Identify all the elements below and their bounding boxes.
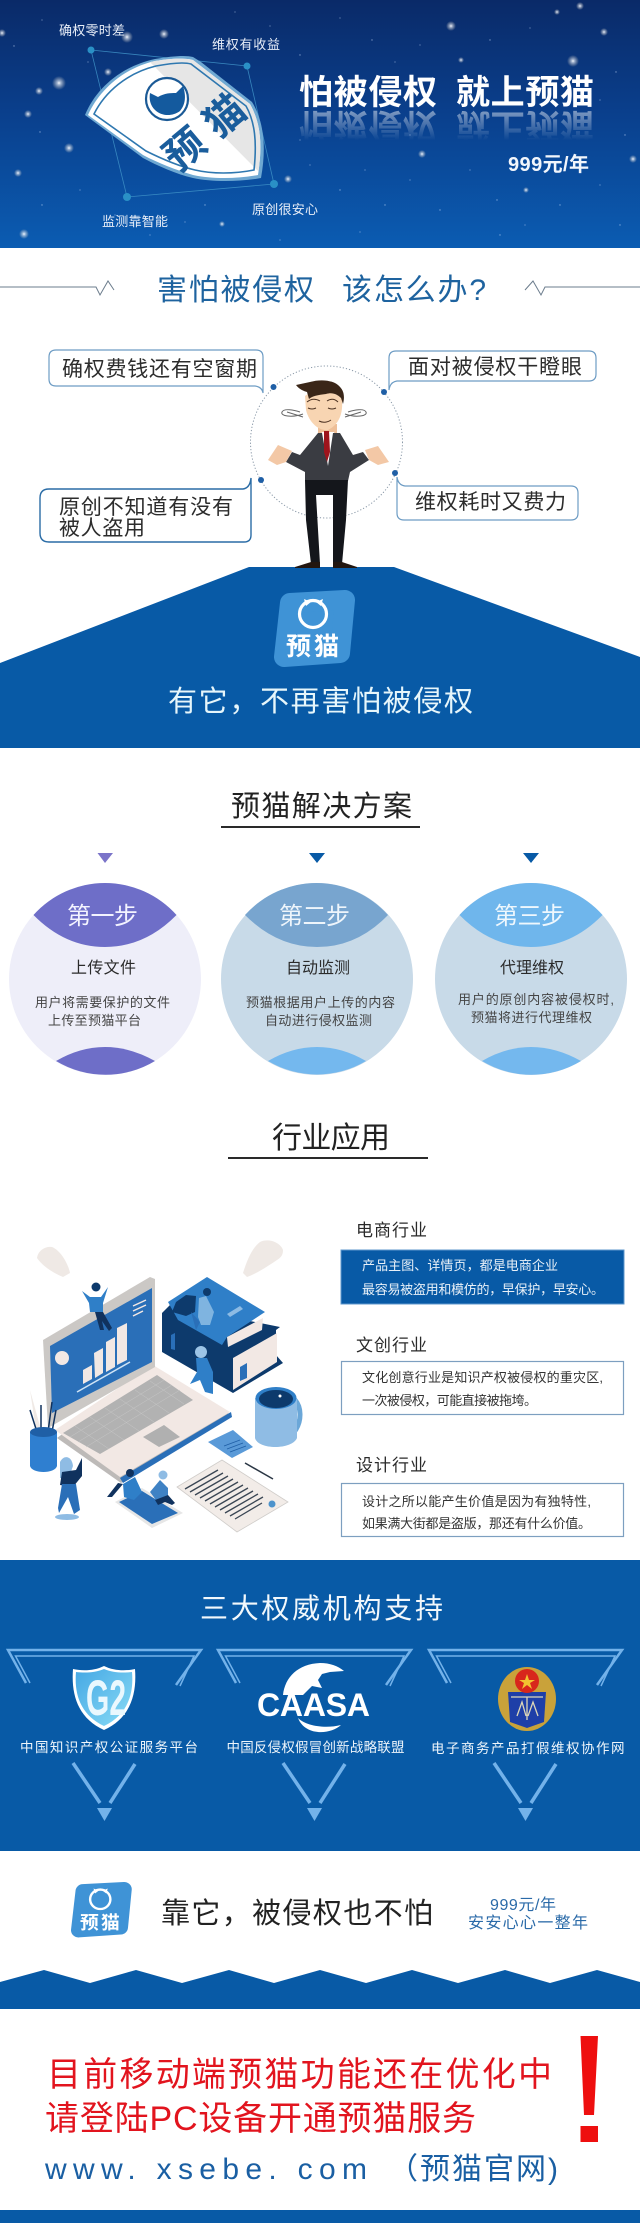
- heading: industry: 行业应用: [272, 1122, 390, 1155]
- panel: step one: 上传至预猫平台: [48, 1013, 141, 1028]
- platform trapezoid: [0, 567, 640, 748]
- price note: [468, 1896, 588, 1932]
- slogan: not afraid: 靠它，被侵权也不怕: [161, 1897, 433, 1930]
- price note: 安安心心一整年: [468, 1914, 588, 1932]
- icon: yumao shield logo: [85, 55, 270, 181]
- panel: design: 设计之所以能产生价值是因为有独特性,: [362, 1494, 591, 1509]
- panel: authorities: [0, 1560, 640, 1851]
- panel: step one: 上传文件: [71, 959, 136, 977]
- heading: what to do: 该怎么办?: [342, 274, 486, 307]
- speech bubble: 干瞪眼: [389, 351, 596, 390]
- panel: culture: 文化创意行业是知识产权被侵权的重灾区,: [362, 1370, 603, 1385]
- website line: [44, 2153, 558, 2186]
- laptop screen: [43, 1277, 155, 1428]
- dark book: [162, 1305, 283, 1393]
- woman walking: [190, 1346, 213, 1394]
- speech bubble: 盗用: [40, 478, 251, 542]
- speech bubble: 干瞪眼: 面对被侵权干瞪眼: [408, 356, 582, 379]
- icon: CAASA logo: [257, 1663, 370, 1732]
- panel: step three: [435, 883, 627, 1075]
- panel: step three: 第三步: [494, 903, 565, 930]
- woman with raised arm: [55, 1457, 82, 1520]
- icon: small yumao app icon: [78, 1888, 124, 1933]
- price note: 999元/年: [490, 1896, 556, 1914]
- icon: small yumao app icon: 预猫: [80, 1912, 120, 1933]
- icon: G2 shield: G2: [86, 1670, 126, 1726]
- bracket: first column: [8, 1650, 201, 1803]
- icon: CAASA logo: CAASA: [257, 1687, 370, 1723]
- panel: hero banner: [0, 0, 640, 248]
- icon: yumao shield logo: 预猫: [156, 87, 255, 180]
- labels around shield: 原创很安心: [252, 202, 318, 217]
- laptop base: [57, 1367, 231, 1483]
- panel: e-commerce: 最容易被盗用和模仿的，早保护，早安心。: [362, 1282, 604, 1297]
- phone and people: [107, 1469, 183, 1528]
- frame node dots: [88, 46, 278, 201]
- notice text: 目前移动端预猫功能还在优化中: [47, 2056, 552, 2094]
- icon: red exclamation mark: [580, 2036, 598, 2142]
- platform names: 电子商务产品打假维权协作网: [431, 1740, 624, 1756]
- person sitting on screen: [82, 1282, 112, 1331]
- panel: step one: 第一步: [67, 903, 138, 930]
- illustration: isometric laptop workspace: [30, 1240, 300, 1532]
- speech bubble: 盗用: 被人盗用: [59, 517, 145, 540]
- heading: solution: 预猫解决方案: [231, 790, 412, 823]
- panel: design: 设计行业: [356, 1456, 427, 1475]
- footer bar: [0, 2210, 640, 2223]
- dizzy swirls: [282, 410, 366, 417]
- document: [177, 1460, 288, 1532]
- labels around shield: 维权有收益: [212, 37, 280, 52]
- star field: [0, 2, 637, 241]
- frame lines around shield: [91, 50, 274, 197]
- step arrows: [98, 853, 539, 863]
- zigzag band: [0, 1970, 640, 2009]
- dotted circle around man: [250, 366, 402, 518]
- icon: shrugging businessman: [268, 380, 389, 568]
- panel: culture: [342, 1336, 624, 1414]
- pencil cup: [30, 1390, 57, 1472]
- platform names: [20, 1739, 624, 1756]
- platform names: 中国知识产权公证服务平台: [20, 1739, 198, 1755]
- panel: step three: 预猫将进行代理维权: [471, 1010, 592, 1025]
- notice text: [45, 2056, 552, 2138]
- panel: step two: 预猫根据用户上传的内容: [246, 995, 395, 1010]
- notice text: 请登陆PC设备开通预猫服务: [45, 2100, 476, 2138]
- speech bubble: 确权费钱: 确权费钱还有空窗期: [62, 358, 257, 381]
- panel: step two: 第二步: [279, 903, 350, 930]
- panel: culture: 文创行业: [356, 1336, 427, 1355]
- heading: what to do: 害怕被侵权: [157, 274, 314, 307]
- arrows: [97, 1808, 533, 1821]
- icon: national emblem badge: [498, 1667, 556, 1731]
- hero title: [299, 74, 594, 112]
- speech bubble: 盗用: 原创不知道有没有: [59, 496, 233, 519]
- people on the books: [172, 1295, 196, 1316]
- hero title: 怕被侵权: [299, 74, 437, 112]
- labels around shield: 确权零时差: [59, 23, 125, 38]
- icon: G2 shield: [73, 1666, 135, 1730]
- website line: （预猫官网): [388, 2153, 558, 2186]
- panel: step two: 自动监测: [286, 959, 350, 977]
- keyboard: [63, 1375, 193, 1454]
- website line: www. xsebe. com: [44, 2153, 367, 2186]
- panel: step three: 用户的原创内容被侵权时,: [458, 992, 614, 1007]
- panel: e-commerce: [341, 1221, 624, 1304]
- hero title reflection: [299, 106, 594, 144]
- panel: step one: 用户将需要保护的文件: [35, 995, 170, 1010]
- bar chart on screen: [55, 1300, 146, 1392]
- bracket: second column: [218, 1650, 411, 1803]
- icon: yumao app icon: [284, 599, 345, 661]
- icon: yumao app icon: 预猫: [286, 633, 339, 661]
- hero price: 999元/年: [508, 153, 589, 176]
- panel: design: [342, 1456, 624, 1536]
- panel: culture: 一次被侵权，可能直接被拖垮。: [362, 1393, 537, 1408]
- panel: design: 如果满大街都是盗版，那还有什么价值。: [362, 1516, 591, 1531]
- panel: step one: [9, 883, 201, 1075]
- labels around shield: [59, 23, 318, 229]
- panel: step three: 代理维权: [500, 959, 564, 977]
- platform names: 中国反侵权假冒创新战略联盟: [226, 1739, 404, 1755]
- panel: step two: 自动进行侵权监测: [265, 1013, 372, 1028]
- hero title reflection: 怕被侵权: [299, 106, 437, 144]
- panel: e-commerce: 电商行业: [356, 1221, 427, 1240]
- panel: e-commerce: 产品主图、详情页，都是电商企业: [362, 1258, 558, 1273]
- speech bubble: 确权费钱: [49, 350, 263, 393]
- mug: [255, 1387, 300, 1447]
- slogan: 有它，不再害怕被侵权: [168, 685, 473, 718]
- labels around shield: 监测靠智能: [102, 214, 168, 229]
- panel: step two: [221, 883, 413, 1075]
- authorities heading: 三大权威机构支持: [200, 1593, 443, 1624]
- clouds: [37, 1240, 283, 1277]
- blue book: [168, 1277, 265, 1345]
- speech bubble: 耗时费力: 维权耗时又费力: [415, 491, 566, 514]
- speech bubble: 耗时费力: [397, 477, 578, 520]
- hero title: 就上预猫: [456, 74, 594, 112]
- note card: [208, 1430, 253, 1458]
- heading: what to do: [0, 274, 640, 307]
- bracket: third column: [429, 1650, 622, 1803]
- hero title reflection: 就上预猫: [456, 106, 594, 144]
